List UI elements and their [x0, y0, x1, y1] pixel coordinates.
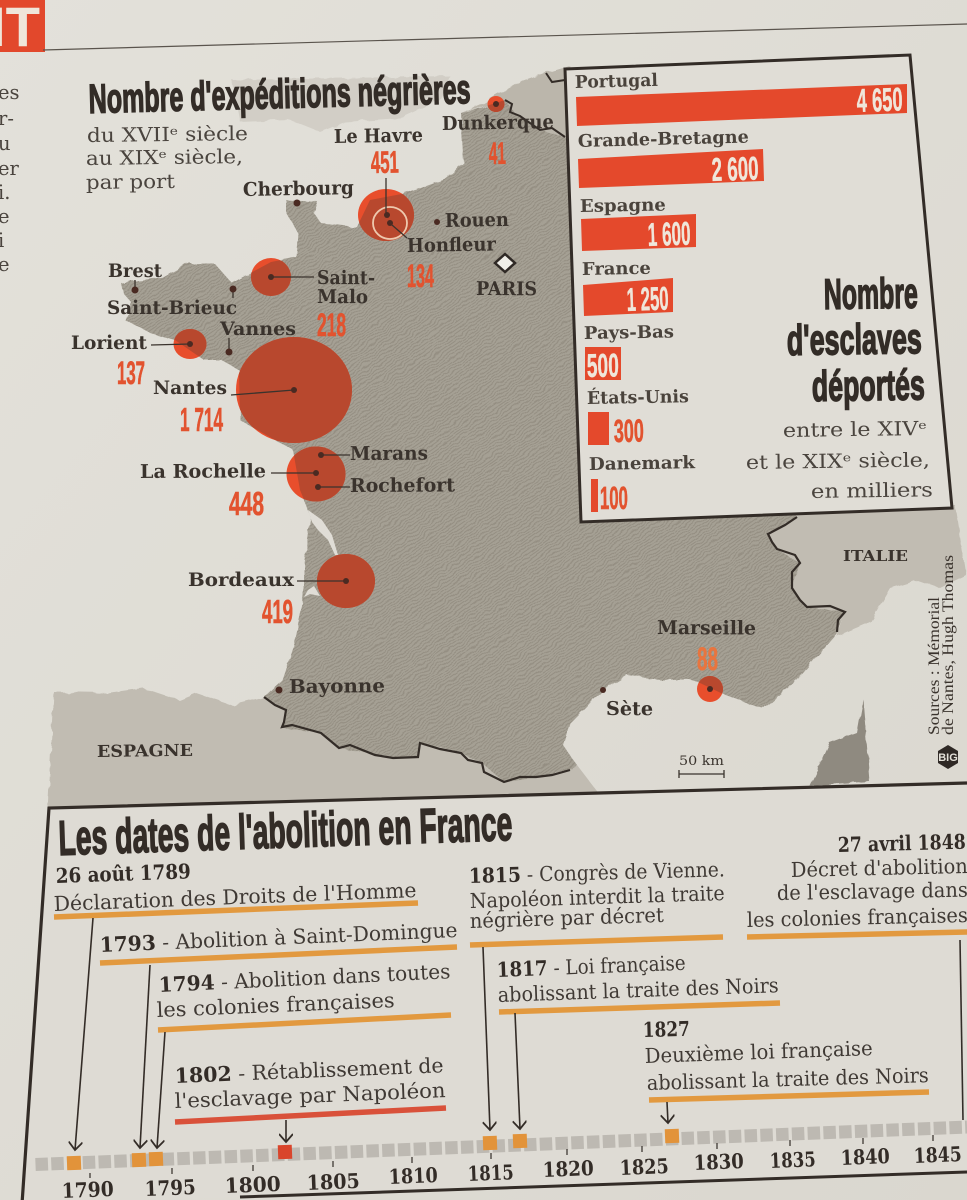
city labels: Le Havre	[334, 124, 423, 148]
map subtitle	[86, 122, 248, 194]
city labels: Saint-	[317, 267, 375, 289]
bar: France: France	[582, 259, 651, 280]
city labels: Marans	[350, 443, 428, 465]
event: 1817: 1817 - Loi française	[496, 951, 686, 982]
icon: Paris diamond	[495, 254, 515, 272]
leader lines and city dots	[132, 101, 713, 694]
timeline: year squares	[36, 1127, 967, 1170]
map subtitle: du XVIIᵉ siècle	[87, 122, 248, 147]
event: 1794: les colonies françaises	[156, 988, 395, 1022]
city labels: ITALIE	[843, 547, 908, 565]
port counts: 1 714	[180, 401, 223, 438]
map subtitle: au XIXᵉ siècle,	[86, 145, 243, 170]
city labels: Bordeaux	[188, 569, 295, 591]
timeline: year labels: 1840	[840, 1144, 890, 1170]
panel heading	[786, 270, 925, 411]
city labels: Brest	[108, 260, 162, 282]
event: 1802: l'esclavage par Napoléon	[174, 1078, 446, 1113]
icon: BIG logo	[938, 745, 958, 769]
bar: Danemark	[589, 453, 696, 516]
circle: Honfleur ring	[373, 207, 407, 239]
city labels: Vannes	[219, 318, 296, 340]
bar: Espagne: 1 600	[647, 215, 691, 253]
city labels: Nantes	[153, 377, 227, 399]
circle: Dunkerque	[488, 96, 504, 112]
event: 1827: abolissant la traite des Noirs	[646, 1063, 929, 1095]
timeline: year labels: 1835	[769, 1147, 816, 1173]
bar: Grande-Bretagne: Grande-Bretagne	[578, 128, 749, 152]
marker: 1789	[67, 1156, 81, 1170]
port counts: 88	[697, 641, 718, 677]
bar: France: 1 250	[626, 280, 669, 318]
city labels: Honfleur	[407, 233, 497, 257]
panel subheading: et le XIXᵉ siècle,	[746, 448, 930, 474]
circle: Lorient	[174, 329, 206, 359]
bar: Danemark: Danemark	[589, 453, 696, 475]
panel subheading: entre le XIVᵉ	[783, 417, 927, 442]
circle: Bordeaux	[317, 554, 375, 608]
event: 1802: 1802 - Rétablissement de	[174, 1053, 444, 1088]
city labels: Cherbourg	[243, 177, 354, 201]
city labels: Sète	[606, 698, 653, 720]
bar: France	[582, 259, 673, 318]
timeline: year labels: 1805	[306, 1169, 360, 1195]
bar: Pays-Bas: Pays-Bas	[584, 322, 674, 344]
panel: enslaved people deported by country	[565, 55, 952, 522]
panel subheading: en milliers	[811, 478, 933, 503]
city labels: Bayonne	[289, 675, 385, 698]
timeline: year labels: 1810	[388, 1163, 438, 1189]
city labels: Rouen	[445, 209, 509, 232]
bar: Espagne: Espagne	[580, 196, 666, 217]
bar: Espagne	[580, 196, 696, 253]
event: 1789	[53, 859, 418, 1150]
map title: Nombre d'expéditions négrières	[88, 66, 471, 122]
port counts: 137	[117, 355, 145, 391]
bar: Grande-Bretagne	[578, 128, 764, 188]
timeline: ticks	[90, 1135, 933, 1178]
bar: Portugal: 4 650	[856, 80, 903, 119]
event: 1817: abolissant la traite des Noirs	[497, 973, 779, 1007]
event: 1815: 1815 - Congrès de Vienne.	[469, 857, 725, 888]
port counts: 419	[262, 593, 293, 630]
timeline: year labels: 1830	[693, 1149, 744, 1175]
city labels: Dunkerque	[442, 111, 554, 135]
circle: Saint-Malo	[251, 258, 291, 296]
timeline: year labels: 1800	[224, 1172, 281, 1198]
port counts: 134	[407, 258, 434, 294]
circles: darker tint where they overlap land	[174, 96, 723, 702]
bar: Grande-Bretagne: 2 600	[711, 149, 759, 188]
map: estuaries	[304, 510, 338, 597]
circle: La Rochelle	[286, 446, 346, 502]
port counts: 448	[229, 485, 264, 522]
event: 1827: 1827	[643, 1017, 690, 1042]
bar: États-Unis	[587, 386, 689, 449]
circle: Nantes	[236, 337, 352, 443]
scale bar: 50 km	[679, 754, 724, 769]
bar: États-Unis: 300	[613, 412, 644, 449]
sources credit: de Nantes, Hugh Thomas	[940, 555, 957, 735]
port counts: 41	[489, 136, 506, 171]
city labels: ESPAGNE	[97, 741, 193, 761]
sources credit: Sources : Mémorial	[926, 596, 943, 735]
event: 1793: 1793 - Abolition à Saint-Domingue	[99, 918, 458, 957]
bar: États-Unis: États-Unis	[587, 386, 689, 409]
city labels	[71, 111, 908, 761]
event: 1802	[174, 1053, 446, 1142]
circle: Le Havre	[358, 189, 414, 241]
scale bar	[679, 754, 724, 778]
timeline: year labels: 1820	[542, 1156, 594, 1182]
city labels: Marseille	[657, 617, 756, 640]
cropped article column text	[0, 81, 20, 276]
map: land borders	[264, 73, 845, 782]
city labels: Lorient	[71, 332, 147, 354]
city labels: Saint-Brieuc	[107, 297, 237, 319]
panel subheading	[746, 417, 933, 503]
event: 1815: Napoléon interdit la traite	[469, 881, 725, 913]
event: 1793	[99, 918, 458, 1148]
port counts	[117, 136, 718, 677]
city labels: La Rochelle	[140, 460, 266, 483]
circle: Marseille	[697, 676, 723, 702]
timeline: year labels: 1825	[619, 1154, 669, 1180]
event: 1789: Déclaration des Droits de l'Homme	[53, 878, 417, 916]
event: 1789: 26 août 1789	[55, 859, 191, 888]
panel: abolition timeline	[22, 783, 967, 1200]
map subtitle: par port	[86, 170, 175, 194]
city labels: PARIS	[476, 278, 537, 300]
event: 1817	[496, 951, 780, 1129]
bar: Portugal: Portugal	[575, 71, 658, 93]
timeline: year labels: 1815	[467, 1160, 514, 1186]
bar: Danemark: 100	[600, 480, 628, 516]
icon: BIG logo: BIG	[938, 752, 958, 764]
event: 1794: 1794 - Abolition dans toutes	[158, 959, 451, 997]
city labels: Malo	[317, 286, 368, 308]
event: 1815: négrière par décret	[469, 903, 665, 933]
event: 1815	[469, 857, 725, 1130]
timeline: year labels	[61, 1142, 962, 1200]
city labels: Rochefort	[350, 474, 455, 497]
event: 1827	[643, 1017, 929, 1123]
map: neighbouring land	[48, 66, 966, 812]
bar: Pays-Bas: 500	[586, 346, 619, 384]
sources credit	[926, 555, 957, 735]
event: 1848	[747, 830, 967, 1120]
bar: Portugal	[575, 71, 907, 126]
event: 1794	[156, 959, 451, 1148]
timeline heading: Les dates de l'abolition en France	[58, 797, 513, 866]
map title	[86, 66, 471, 194]
map: France land	[121, 100, 845, 782]
event: 1827: Deuxième loi française	[644, 1036, 873, 1068]
port counts: 451	[371, 145, 399, 180]
panel: map of France	[48, 66, 966, 812]
port counts: 218	[317, 307, 346, 343]
bar: Pays-Bas	[584, 322, 674, 384]
